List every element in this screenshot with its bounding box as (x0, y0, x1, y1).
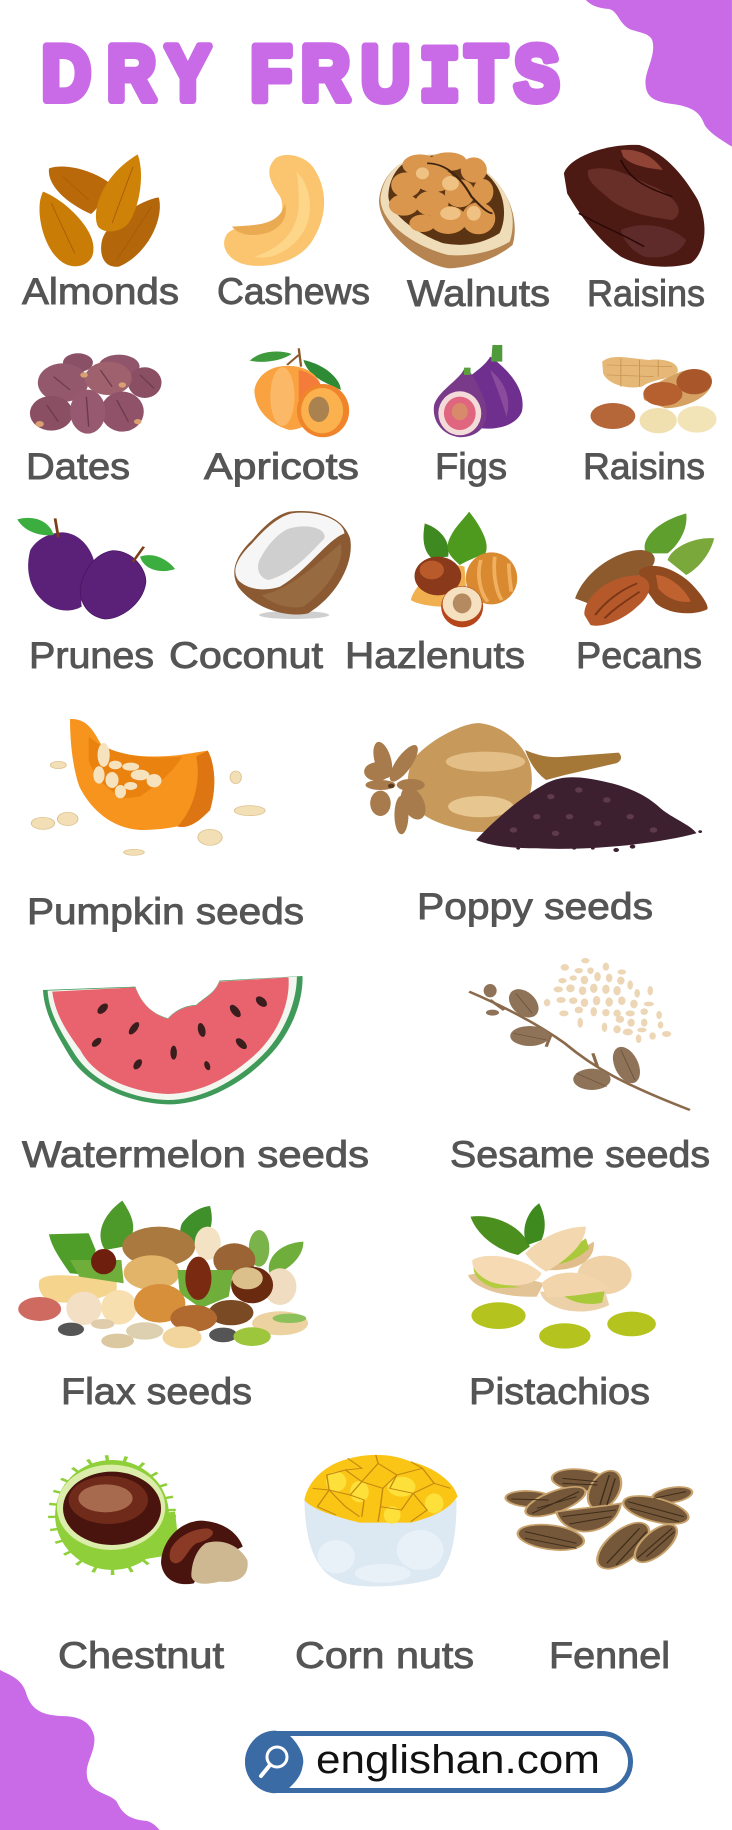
label: Fennel: Fennel (549, 1635, 670, 1676)
item: raisins (peanuts illustration) (583, 357, 717, 487)
label: Flax seeds: Flax seeds (61, 1371, 252, 1412)
icon: walnut (379, 152, 515, 268)
label: Figs: Figs (435, 446, 507, 487)
icon: coconut (234, 511, 351, 619)
decorative blob: bottom left (0, 1670, 160, 1830)
item: apricots (204, 348, 359, 487)
item: prunes (17, 518, 175, 676)
item: walnuts (379, 152, 550, 314)
item: watermelon seeds (22, 976, 369, 1175)
label: Raisins: Raisins (583, 446, 705, 487)
label: Sesame seeds: Sesame seeds (450, 1134, 710, 1175)
icon: cashew (224, 155, 324, 266)
label: Walnuts: Walnuts (407, 273, 550, 314)
label: Pumpkin seeds: Pumpkin seeds (27, 891, 304, 932)
search bar: englishan.com (245, 1731, 631, 1793)
label: Cashews: Cashews (217, 271, 370, 312)
label: Dates: Dates (26, 446, 130, 487)
label: Corn nuts: Corn nuts (295, 1635, 474, 1676)
label: Raisins: Raisins (587, 273, 705, 314)
label: Almonds: Almonds (22, 271, 179, 312)
label: Watermelon seeds: Watermelon seeds (22, 1134, 369, 1175)
item: pistachios (468, 1203, 656, 1412)
icon: watermelon slice (43, 976, 303, 1104)
item: corn nuts (295, 1455, 474, 1676)
item: pecans (575, 513, 714, 676)
decorative blob: top right (586, 0, 732, 147)
icon: raisin (564, 145, 704, 267)
icon: chestnut (55, 1460, 248, 1584)
item: poppy seeds (364, 723, 702, 927)
icon: prunes (17, 518, 175, 619)
item: flax seeds (18, 1201, 308, 1412)
item: hazelnuts (345, 512, 525, 676)
icon: pistachios (468, 1203, 656, 1349)
icon: bowl of corn (304, 1455, 457, 1586)
icon: apricot (250, 348, 349, 437)
label: Pecans: Pecans (576, 635, 702, 676)
label: Apricots: Apricots (204, 446, 359, 487)
item: coconut (169, 511, 351, 676)
item: almonds (22, 154, 179, 312)
website text: englishan.com (316, 1738, 600, 1782)
icon: pumpkin slice with seeds (31, 719, 265, 855)
label: Hazlenuts: Hazlenuts (345, 635, 525, 676)
item: chestnut (55, 1460, 248, 1676)
icon: almonds (39, 154, 160, 267)
item: cashews (217, 155, 370, 312)
icon: nut and seed mix (18, 1201, 308, 1348)
icon: pecans (575, 513, 714, 626)
item: sesame seeds (450, 958, 710, 1175)
icon: poppy capsule and seeds (364, 723, 702, 852)
icon: fennel seeds (505, 1467, 695, 1575)
item: fennel (505, 1467, 695, 1676)
label: Chestnut: Chestnut (58, 1635, 225, 1676)
item: raisins (date) (564, 145, 705, 314)
pill outline (248, 1734, 630, 1790)
label: Pistachios: Pistachios (469, 1371, 650, 1412)
search icon panel (245, 1731, 303, 1793)
item: figs (434, 345, 523, 487)
icon: hazelnuts (411, 512, 517, 627)
label: Poppy seeds: Poppy seeds (417, 886, 653, 927)
title: DRY FRUITS (42, 31, 559, 123)
icon: fig (434, 345, 523, 437)
label: Coconut: Coconut (169, 635, 324, 676)
item: dates (26, 353, 162, 487)
icon: sesame branch and seeds (469, 958, 690, 1110)
icon: peanuts (591, 357, 717, 433)
item: pumpkin seeds (27, 719, 304, 932)
icon: dates (30, 353, 162, 434)
label: Prunes: Prunes (29, 635, 154, 676)
